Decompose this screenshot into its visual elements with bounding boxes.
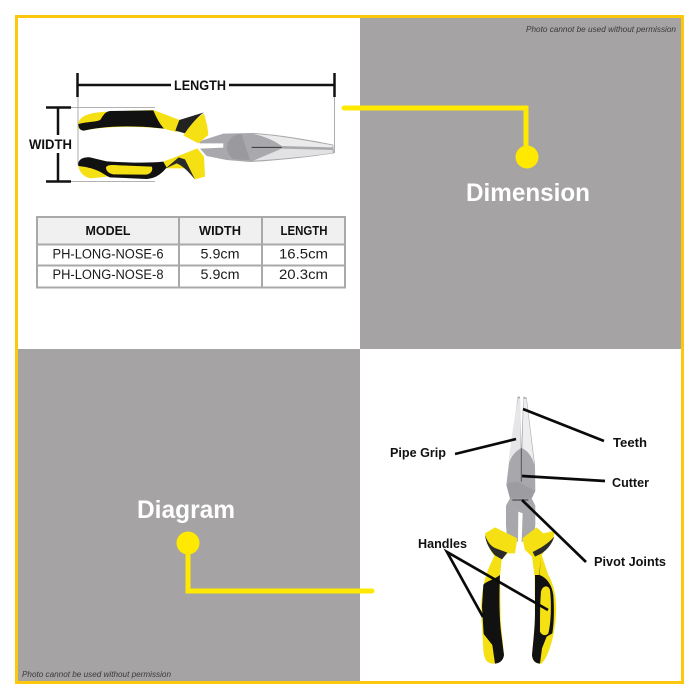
part label: pipe grip: Pipe Grip [390, 446, 446, 460]
connector: dimension [344, 108, 538, 168]
table rows: 16.5cm [279, 246, 328, 262]
table grid [37, 217, 345, 288]
part label: handles: Handles [418, 537, 467, 551]
metal head [198, 133, 334, 162]
part label: cutter: Cutter [612, 476, 649, 490]
table header text: LENGTH [280, 223, 328, 238]
guide lines [70, 97, 334, 182]
length dimension line [78, 73, 334, 97]
right handle [522, 527, 556, 664]
table rows [52, 246, 328, 282]
pointer lines [447, 409, 605, 617]
parts diagram: vertical pliers [390, 397, 666, 664]
connector: diagram [176, 532, 372, 591]
table header text: MODEL [86, 223, 131, 238]
specification table [37, 217, 345, 288]
table header text [86, 223, 328, 238]
table header background [37, 217, 345, 244]
part label: pivot joints: Pivot Joints [594, 555, 666, 569]
panel: dimension background [360, 18, 681, 349]
lower handle [163, 148, 205, 179]
icon: pliers head [506, 397, 535, 542]
heading: dimension: Dimension [466, 179, 590, 207]
table rows: PH-LONG-NOSE-6 [52, 246, 164, 262]
icon: horizontal pliers [78, 110, 334, 179]
table rows: 20.3cm [279, 267, 328, 282]
panel: diagram background [18, 349, 360, 681]
width label: WIDTH [29, 137, 72, 152]
table rows: 5.9cm [200, 267, 240, 282]
table rows: PH-LONG-NOSE-8 [52, 267, 164, 282]
icon: pliers handles [481, 527, 556, 664]
dimension diagram: pliers with measurements [29, 73, 334, 182]
table rows: 5.9cm [200, 246, 240, 262]
permission note bottom: Photo cannot be used without permission [22, 669, 171, 679]
permission note top: Photo cannot be used without permission [526, 24, 676, 34]
left handle [481, 527, 517, 664]
length label: LENGTH [174, 78, 226, 93]
width dimension line [46, 108, 71, 182]
part label: teeth: Teeth [613, 436, 647, 450]
heading: diagram: Diagram [137, 496, 235, 524]
table header text: WIDTH [199, 223, 241, 238]
upper handle [78, 110, 183, 132]
